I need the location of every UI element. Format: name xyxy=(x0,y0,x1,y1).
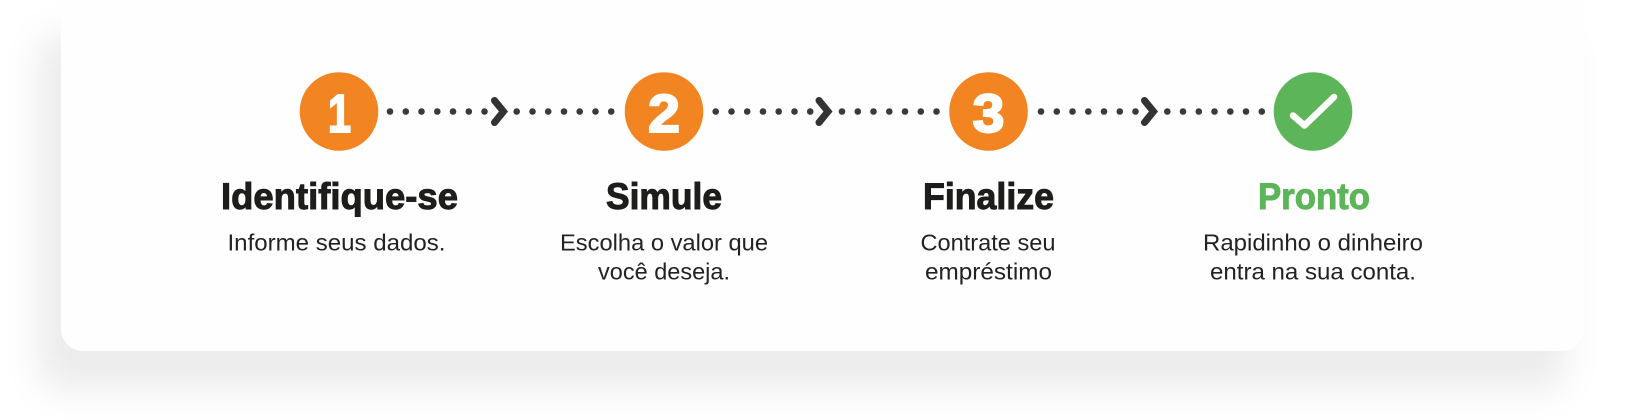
text: step 4 description: entra na sua conta. xyxy=(1210,258,1416,284)
icon: number 3 xyxy=(949,72,1028,151)
connector arrow 1 xyxy=(387,100,614,122)
icon: number 2: 2 xyxy=(648,84,680,144)
card shadow xyxy=(38,34,1566,390)
card panel xyxy=(61,0,1584,351)
text: step 1 description: Informe seus dados. xyxy=(228,230,446,256)
heading: Pronto: Pronto xyxy=(1258,175,1370,217)
step 4: Pronto xyxy=(1203,72,1423,284)
text: step 3 description: Contrate seu xyxy=(920,230,1056,256)
text: step 3 description: empréstimo xyxy=(925,258,1052,284)
icon: green check xyxy=(1274,72,1352,151)
connector arrow 3 xyxy=(1038,100,1265,122)
step 2: Simule xyxy=(560,72,768,284)
text: step 4 description: Rapidinho o dinheiro xyxy=(1203,230,1423,256)
icon: number 3: 3 xyxy=(972,84,1004,144)
icon: number 1: 1 xyxy=(328,84,351,144)
connector arrow 2 xyxy=(712,100,940,122)
text: step 2 description: você deseja. xyxy=(598,258,730,284)
icon: number 2 xyxy=(625,72,703,151)
heading: Simule: Simule xyxy=(606,175,722,217)
step 1: Identifique-se xyxy=(221,72,458,256)
text: step 2 description: Escolha o valor que xyxy=(560,230,768,256)
heading: Finalize: Finalize xyxy=(923,175,1054,217)
icon: number 1 xyxy=(300,72,378,151)
heading: Identifique-se: Identifique-se xyxy=(221,175,458,217)
step 3: Finalize xyxy=(920,72,1056,284)
